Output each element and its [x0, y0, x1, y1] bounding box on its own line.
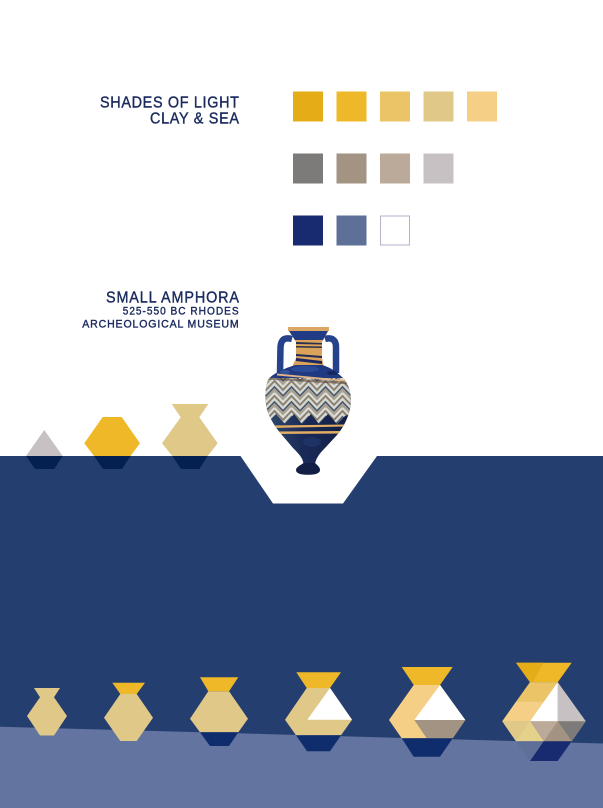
foot [296, 463, 320, 475]
heading: shades of light: CLAY & SEA [150, 110, 240, 128]
vase: yellow hexagon [84, 417, 140, 469]
swatch row: yellows [293, 92, 497, 122]
bottom vase 1 [27, 688, 67, 736]
amphora photo illustration [265, 327, 351, 475]
heading: shades of light [100, 94, 240, 128]
lip [288, 327, 329, 331]
swatch row: clays [293, 154, 454, 184]
sea background with notch [0, 456, 603, 808]
neck [289, 331, 328, 367]
palette swatches [293, 92, 497, 246]
heading: small amphora: 525-550 BC RHODES [123, 305, 239, 317]
bottom vase 4 [285, 672, 352, 751]
bottom vase 2 [104, 683, 153, 741]
bottom vase 6: full palette [502, 663, 586, 761]
heading: shades of light: SHADES OF LIGHT [100, 94, 239, 112]
vase: sand with neck [162, 404, 218, 469]
body [265, 365, 351, 464]
handles [280, 338, 336, 373]
bottom vase 5 [389, 667, 465, 757]
swatch row: sea [293, 216, 410, 246]
lower sloped band [0, 727, 603, 808]
vase: small grey [26, 430, 63, 469]
bottom vase 3 [190, 677, 248, 746]
heading: small amphora [82, 289, 240, 330]
heading: small amphora: SMALL AMPHORA [106, 289, 240, 307]
heading: small amphora: ARCHEOLOGICAL MUSEUM [82, 318, 239, 330]
